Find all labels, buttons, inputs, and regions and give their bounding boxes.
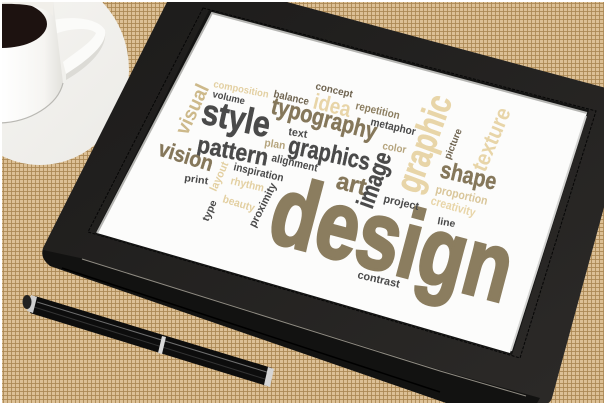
word cloud: alignment — [270, 152, 319, 175]
word cloud: vision — [156, 136, 216, 176]
word cloud: volume — [211, 89, 246, 107]
stitching — [88, 8, 596, 358]
saucer — [0, 0, 129, 165]
word cloud: plan — [264, 137, 286, 152]
word cloud: picture — [443, 127, 465, 161]
screen bezel — [95, 10, 589, 355]
word cloud: project — [382, 193, 420, 213]
word cloud: type — [201, 198, 220, 223]
coffee cup — [0, 0, 105, 123]
word cloud: texture — [467, 104, 516, 175]
word cloud: rhythm — [229, 175, 265, 195]
word cloud: composition — [212, 79, 269, 101]
word cloud: pattern — [195, 131, 271, 172]
word cloud: creativity — [429, 193, 478, 220]
word cloud: style — [198, 91, 274, 145]
word cloud: color — [381, 140, 407, 156]
word cloud: contrast — [356, 269, 401, 291]
word cloud: image — [351, 148, 397, 212]
word cloud: repetition — [354, 100, 401, 122]
word cloud: design — [260, 155, 525, 323]
word cloud: beauty — [221, 193, 257, 215]
word cloud: typography — [269, 93, 380, 146]
word cloud: layout — [208, 160, 231, 193]
word cloud — [156, 79, 525, 323]
word cloud: art — [334, 168, 369, 201]
word cloud: inspiration — [232, 161, 285, 184]
screen bevel highlights — [97, 13, 587, 233]
word cloud: visual — [172, 81, 214, 138]
word cloud: metaphor — [369, 116, 417, 138]
word cloud: graphic — [387, 89, 460, 198]
stylus pen — [22, 295, 274, 387]
word cloud: concept — [314, 81, 354, 101]
word cloud: balance — [272, 88, 310, 108]
word cloud: shape — [438, 157, 499, 196]
word cloud: graphics — [286, 131, 373, 176]
tablet screen — [97, 13, 587, 353]
word cloud: line — [436, 216, 457, 230]
word cloud: proportion — [434, 182, 489, 208]
word cloud: print — [184, 173, 210, 187]
word cloud: text — [288, 126, 308, 141]
right bevel — [511, 116, 586, 351]
word cloud: idea — [311, 89, 354, 122]
word cloud: proximity — [247, 180, 280, 229]
